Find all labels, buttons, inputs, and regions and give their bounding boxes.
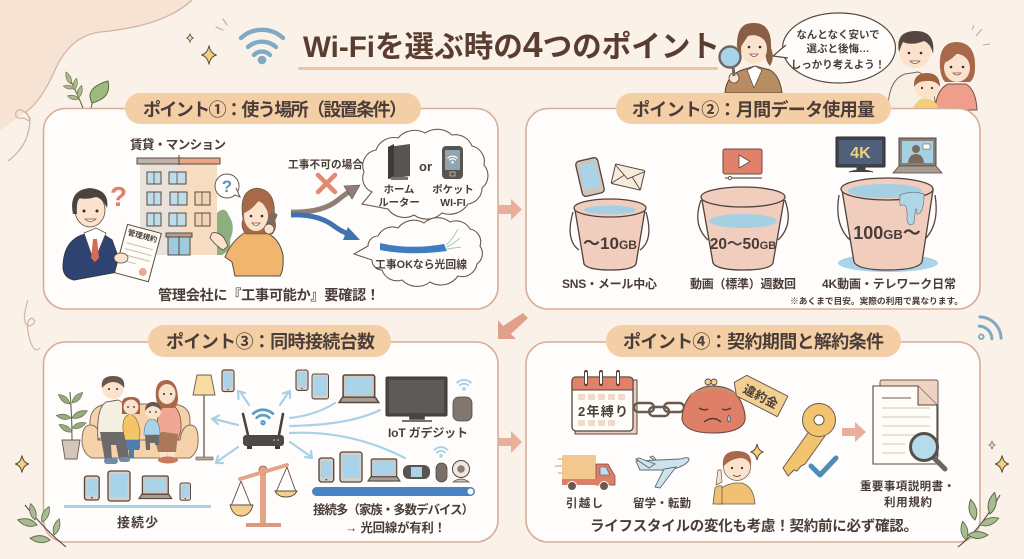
question bubble xyxy=(215,174,240,198)
family illustration xyxy=(888,25,990,110)
title: Wi-Fiを選ぶ時の4つのポイント xyxy=(303,24,720,65)
icon: 4K TV: 4K xyxy=(850,145,871,162)
heading: point 1: ポイント①：使う場所（設置条件） xyxy=(143,99,407,120)
icon: calendar two year: 2年縛り xyxy=(578,404,628,419)
icon: laptop video call xyxy=(893,138,942,173)
heading: point 4: ポイント④：契約期間と解約条件 xyxy=(623,331,884,352)
icon: woman on phone xyxy=(210,188,283,276)
bucket: 20-50GB: 20～50GB xyxy=(710,236,776,253)
question bubble: ? xyxy=(222,177,232,196)
icon: laptop xyxy=(339,375,379,402)
label: video: 動画（標準）週数回 xyxy=(690,276,796,291)
icon: pocket wifi xyxy=(442,146,463,179)
icon: calendar two year xyxy=(572,372,637,434)
icon: video play xyxy=(723,149,762,180)
icons: many devices xyxy=(319,447,470,482)
label: rental mansion: 賃貸・マンション xyxy=(130,137,226,152)
icon: sad purse xyxy=(682,379,745,433)
person: girl xyxy=(122,397,140,458)
bucket: 20-50GB xyxy=(698,187,788,270)
panel: point 3 simultaneous connections xyxy=(44,325,498,542)
tag: penalty: 違約金 xyxy=(741,381,781,412)
panel: point 1 install location xyxy=(44,93,498,309)
arrow: point 2 to 3 xyxy=(498,313,528,339)
speech bubble xyxy=(773,13,896,83)
label: important docs xyxy=(860,479,955,509)
panel: point 2 monthly data xyxy=(526,93,980,309)
decor: sparkles right xyxy=(989,441,1009,472)
speech bubble: なんとなく安いで xyxy=(796,28,880,41)
label: study abroad: 留学・転勤 xyxy=(633,496,691,510)
icon: contract document: 管理規約 xyxy=(127,227,159,245)
speech bubble: しっかり考えよう！ xyxy=(791,58,885,71)
icon: man with contract: ? xyxy=(110,181,127,212)
label: important docs: 利用規約 xyxy=(884,495,932,509)
advisor woman with magnifier xyxy=(720,23,782,93)
icon: smartphone xyxy=(575,157,605,197)
icon: fiber cable xyxy=(380,229,461,253)
label: IoT: IoT ガデジット xyxy=(388,425,468,440)
speech bubble: 選ぶと後悔… xyxy=(806,42,870,55)
decor: top-left blob with vine xyxy=(0,0,192,161)
cloud: router or pocket wifi xyxy=(362,129,488,219)
icon: smart speaker xyxy=(453,380,472,421)
icon: big TV xyxy=(386,377,447,421)
arrow: fork to fiber xyxy=(291,215,360,240)
thin line xyxy=(64,505,211,508)
decor: branch bottom-right xyxy=(958,492,1000,547)
sparkles near title xyxy=(186,19,227,64)
decor: branch bottom-left xyxy=(17,503,66,547)
icon: airplane xyxy=(636,456,689,488)
tree xyxy=(217,210,233,255)
icon: document with magnifier xyxy=(873,380,945,469)
title wifi icon xyxy=(241,30,283,64)
person: boy xyxy=(144,402,161,450)
icon: home router xyxy=(388,144,410,180)
heading: point 4 xyxy=(606,325,901,357)
icons: few devices xyxy=(84,471,190,501)
label: home router: ルーター xyxy=(378,197,420,209)
icon: sofa with family xyxy=(82,376,198,464)
callout: lifestyle: ライフスタイルの変化も考慮！契約前に必ず確認。 xyxy=(590,517,918,535)
person: mother xyxy=(155,380,181,464)
decor: sprig top-left xyxy=(63,71,109,108)
cloud: fiber xyxy=(354,218,482,286)
bucket: 10GB xyxy=(570,199,649,270)
building xyxy=(137,155,220,255)
icon: potted plant xyxy=(56,391,89,459)
text: or: or xyxy=(419,159,432,174)
icon: phone and tablet xyxy=(296,370,328,399)
arrows: router to devices xyxy=(212,391,405,463)
icon: chain xyxy=(634,403,684,416)
heading: point 2 xyxy=(616,93,891,124)
label: moving: 引越し xyxy=(566,496,603,510)
tag: penalty xyxy=(729,372,788,417)
label: many connections: 接続多（家族・多数デバイス） xyxy=(313,502,474,517)
label: 4K: 4K動画・テレワーク日常 xyxy=(822,276,956,291)
person: father xyxy=(98,376,131,464)
icon: truck xyxy=(555,455,615,490)
hand holding contract xyxy=(114,253,128,263)
icon: 4K TV xyxy=(836,137,885,172)
label: fiber if OK: 工事OKなら光回線 xyxy=(375,257,467,271)
label: home router: ホーム xyxy=(384,184,414,196)
label: pocket wifi: WI-FI xyxy=(440,198,466,209)
icon: contract document xyxy=(115,224,161,282)
icon: router with wifi xyxy=(243,410,284,449)
icon: man with contract xyxy=(63,181,127,280)
arrow: fork to home router xyxy=(291,185,360,212)
label: fiber advantage: → 光回線が有利！ xyxy=(345,520,446,535)
icon: thinking person xyxy=(713,444,763,504)
label: few connections: 接続少 xyxy=(117,515,158,530)
label: pocket wifi xyxy=(432,184,474,209)
arrow: key to document xyxy=(842,422,866,442)
label: important docs: 重要事項説明書・ xyxy=(860,479,955,493)
heading: point 2: ポイント②：月間データ使用量 xyxy=(632,99,875,120)
icon: key xyxy=(783,404,836,476)
label: pocket wifi: ポケット xyxy=(432,184,474,196)
panel: point 4 contract terms xyxy=(526,325,980,542)
note: ※あくまで目安。実際の利用で異なります。 xyxy=(790,295,963,306)
heading: point 3: ポイント③：同時接続台数 xyxy=(166,331,375,352)
heading: point 1 xyxy=(125,93,421,124)
icon: check mark xyxy=(811,458,836,475)
decor: sparkles left xyxy=(15,456,29,472)
icon: floor lamp xyxy=(193,375,215,460)
label: SNS: SNS・メール中心 xyxy=(562,276,657,291)
icon: phone top xyxy=(222,370,234,392)
heading: point 3 xyxy=(148,325,391,357)
icon: red cross xyxy=(318,175,335,192)
arrow: point 1 to 2 xyxy=(498,199,522,220)
bucket: 100GB overflow: 100GB～ xyxy=(853,223,921,243)
icon: balance scale xyxy=(230,465,297,527)
label: no construction: 工事不可の場合 xyxy=(288,158,363,171)
icon: envelope xyxy=(611,164,645,190)
bucket: 100GB overflow xyxy=(838,178,938,272)
decor: wifi right xyxy=(969,313,1005,349)
bucket: 10GB: ～10GB xyxy=(583,234,637,253)
callout: confirm with management: 管理会社に『工事可能か』要確認！ xyxy=(158,287,380,304)
label: home router xyxy=(378,184,420,209)
arrow: point 3 to 4 xyxy=(498,431,522,453)
decor: vine left middle xyxy=(24,300,40,350)
thick fiber bar xyxy=(312,487,475,496)
